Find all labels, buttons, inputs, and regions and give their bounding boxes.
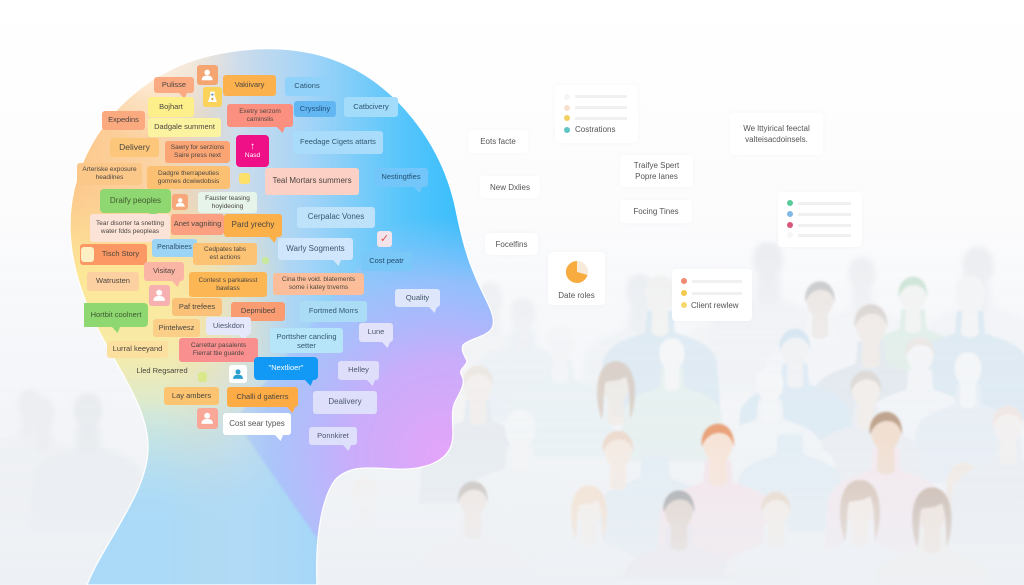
bubble: helley: Helley xyxy=(348,365,369,374)
bubble: lurral xyxy=(107,341,168,358)
card: pie chart date roles xyxy=(548,252,605,305)
blue shirts centre xyxy=(593,456,717,565)
bubble: cedpates: est actions xyxy=(209,254,241,261)
bubble: watrusten: Watrusten xyxy=(96,276,130,285)
bubble: arteriske: Arteriske exposure xyxy=(82,166,137,173)
silhouettes, back row xyxy=(377,242,1024,426)
bubble: quality xyxy=(395,289,440,307)
bubble: cations xyxy=(285,77,329,96)
bubble: carrettar xyxy=(179,338,258,362)
bubble: ponnkiret xyxy=(309,427,357,445)
bubble: bojhart xyxy=(148,97,194,117)
person blue hair xyxy=(736,329,854,467)
icon: white person xyxy=(229,365,247,383)
bubble: bojhart: Bojhart xyxy=(159,102,183,111)
silhouettes, lower left xyxy=(0,389,147,531)
icon: check mark: ✓ xyxy=(380,233,389,245)
bubble: fauster: hoyideoing xyxy=(212,202,243,210)
bubble: draify peoples: Draify peoples xyxy=(110,196,161,205)
man tan hair bottom xyxy=(724,492,828,575)
bubble: nesting xyxy=(374,168,428,187)
bubble: uieskdon xyxy=(206,317,251,335)
bubble: lurral: Lurral keeyand xyxy=(113,344,162,353)
bubble: expedins: Expedins xyxy=(108,115,139,124)
bubble: arteriske xyxy=(77,163,142,185)
bubble: cedpates xyxy=(193,243,257,265)
bubble: penalbiees xyxy=(152,239,197,257)
man tan hair xyxy=(807,371,925,509)
bubble: depmibed xyxy=(231,302,285,321)
bubble: feedage xyxy=(293,131,383,154)
bubble: depmibed: Depmibed xyxy=(241,306,275,315)
bubble: contest: bawlass xyxy=(216,284,240,292)
bubble: catbcivery xyxy=(344,97,398,117)
bubble: pink highlight: ↑ xyxy=(250,141,255,152)
bubble: arteriske: headilnes xyxy=(96,174,123,181)
bubble: tisch story xyxy=(80,244,147,265)
icon: yellow document xyxy=(203,87,222,107)
card: focing tines xyxy=(620,200,692,223)
faded crowd of people xyxy=(0,242,1024,565)
bubble: dealivery: Dealivery xyxy=(328,397,362,406)
bubble: cryssliny: Cryssliny xyxy=(300,104,330,113)
man with orange hair and pink shirt xyxy=(656,424,780,569)
card: traifye spert: Traifye Spert xyxy=(634,161,679,170)
bubble: visitay: Visitay xyxy=(153,266,175,275)
man in white, grey hair xyxy=(763,281,877,415)
bubble: challi: Challi d gatierrs xyxy=(236,392,289,401)
man in blue-grey shirt xyxy=(808,304,934,452)
bubble: dadgale summent xyxy=(148,118,221,137)
person with green hair xyxy=(857,277,969,408)
bubble: exetry xyxy=(227,104,293,127)
bubble: cedpates: Cedpates tabs xyxy=(204,246,246,253)
bubble: delivery: Delivery xyxy=(119,142,150,152)
card: client review list xyxy=(672,269,752,321)
bubble: helley xyxy=(338,361,379,380)
bubble: uieskdon: Uieskdon xyxy=(213,321,244,330)
bubble: cost sear types: Cost sear types xyxy=(229,419,285,428)
front row of the crowd xyxy=(420,361,989,583)
icon: small yellow square xyxy=(239,173,250,184)
head profile with gradient xyxy=(70,49,494,585)
icon: small green square xyxy=(262,257,269,264)
bubble: exetry: Exetry serzom xyxy=(239,108,281,115)
bubble: cina: Cina the void. blatements xyxy=(282,276,355,283)
bubble: fortmed: Fortmed Morrs xyxy=(309,306,358,315)
bubble: feedage: Feedage Cigets attarts xyxy=(300,137,376,146)
bubble: next dose: "Nextlioer" xyxy=(269,363,303,372)
bubble: dadgre: gomnes dcwiwdobsis xyxy=(158,178,219,184)
card text: client review: Client rewlew xyxy=(691,301,739,310)
bubble: exetry: caminslis xyxy=(247,116,273,122)
woman bottom centre xyxy=(802,480,918,577)
card: eots facte xyxy=(468,130,528,153)
bubble: contest xyxy=(189,272,267,297)
icon: coral person xyxy=(197,408,218,429)
bubble: fortmed xyxy=(300,301,367,322)
man with dark hair and mauve shirt xyxy=(623,491,735,579)
bubble: fauster: Fauster teasing xyxy=(205,194,250,202)
card: coloured list xyxy=(778,192,862,247)
bubble: lune xyxy=(359,323,393,342)
bubble: pink highlight: Nasd xyxy=(245,152,260,159)
blue shirt person, far right xyxy=(908,275,1024,420)
bubble: lay ambers xyxy=(164,387,219,405)
pie chart xyxy=(566,261,588,283)
bubble: anet xyxy=(171,214,224,235)
bubble: teal mortars: Teal Mortars summers xyxy=(272,176,352,185)
pale silhouette group xyxy=(458,367,873,565)
card: traifye spert: Popre lanes xyxy=(635,172,678,181)
plain label: lled regsarred: Lled Regsarred xyxy=(136,366,188,375)
card: we ittyirical: valteisacdoinsels. xyxy=(745,135,808,144)
card: focing tines: Focing Tines xyxy=(633,207,679,216)
icon: check mark xyxy=(377,231,392,247)
bubble: dadgale summent: Dadgale summent xyxy=(154,122,215,131)
bubble: fauster xyxy=(198,192,257,213)
peach hair woman bottom xyxy=(537,486,641,573)
card: new dxlies: New Dxlies xyxy=(490,182,530,192)
bubble: tisch story: Tisch Story xyxy=(102,249,139,258)
bubble: catbcivery: Catbcivery xyxy=(353,102,389,111)
bubble: challi xyxy=(227,387,298,407)
bubble: porttsher: Porttsher cancling xyxy=(276,332,337,340)
bubble: pink highlight xyxy=(236,135,269,167)
bubble: expedins xyxy=(102,111,145,130)
bubble: nesting: Nestingtfies xyxy=(381,172,421,181)
icon: orange person small xyxy=(172,194,188,210)
icon: orange person xyxy=(197,65,218,85)
pale silhouettes, mid row xyxy=(504,327,616,458)
bubble: cerpalac xyxy=(297,207,375,228)
bubble: warly xyxy=(278,238,353,260)
bubble: valdivery: Vakiivary xyxy=(235,80,264,89)
pale veil over the far crowd xyxy=(0,230,1024,585)
bubble: tear: Tear disorter ta snetting xyxy=(96,220,164,227)
bubble: pulse xyxy=(154,77,194,93)
card: we ittyirical xyxy=(730,113,823,155)
man tan hair with white coat xyxy=(603,431,633,490)
bubble: porttsher xyxy=(270,328,343,353)
blue shirt person, back left xyxy=(599,275,721,418)
bubble: watrusten xyxy=(87,272,139,291)
card: focelfins xyxy=(485,233,538,255)
bubble: sawry xyxy=(165,141,230,163)
bubble: quality: Quality xyxy=(406,293,429,302)
bubble: pulse: Pulisse xyxy=(162,80,186,89)
bubble: ponnkiret: Ponnkiret xyxy=(317,431,349,440)
bubble: cost peatr xyxy=(361,252,412,271)
bubble: hortbit xyxy=(84,303,148,327)
bubble: tear xyxy=(90,214,170,242)
card: we ittyirical: We lttyirical feectal xyxy=(743,124,810,133)
bubble: pintelwesz: Pintelwesz xyxy=(159,323,194,332)
bubble: sawry: Saire press next xyxy=(174,152,221,159)
woman with brown hair xyxy=(597,361,635,425)
bubble: dadgre xyxy=(147,166,230,189)
bottom fade xyxy=(0,440,1024,585)
card: focelfins: Focelfins xyxy=(495,240,528,248)
woman peach hair right xyxy=(912,462,1016,550)
bubble: teal mortars xyxy=(265,168,359,195)
bubble: sawry: Sawry for serzions xyxy=(171,144,224,151)
bubble: anet: Anet vagniting xyxy=(174,219,221,228)
bubble: draify peoples xyxy=(100,189,171,213)
bubble: cost peatr: Cost peatr xyxy=(369,256,404,265)
bubble: dadgre: Dadgre therrapeuties xyxy=(158,170,219,176)
bubble: hortbit: Hortbit coolnert xyxy=(91,310,141,319)
man grey-blue shirt left xyxy=(419,366,537,504)
bubble: visitay xyxy=(144,262,184,281)
card: traifye spert xyxy=(620,155,693,187)
bubble: dealivery xyxy=(313,391,377,414)
bubble: penalbiees: Penalbiees xyxy=(157,244,192,251)
bubble: tear: water fdds peopleas xyxy=(101,228,159,235)
bubble: pard xyxy=(224,214,282,237)
bubble: pintelwesz xyxy=(153,319,200,337)
card: eots facte: Eots facte xyxy=(480,137,516,146)
card text: costrations: Costrations xyxy=(575,125,615,134)
bubble: carrettar: Fierrat ttie guarde xyxy=(193,350,244,357)
icon: pink person xyxy=(149,285,170,306)
bubble: paf trefees: Paf trefees xyxy=(179,302,215,311)
icon: small lime square xyxy=(198,372,207,382)
woman dark hair bottom right xyxy=(875,488,989,583)
man with brown hair and pink shirt xyxy=(824,412,948,557)
bubble: cryssliny xyxy=(294,101,336,117)
bubble: cerpalac: Cerpalac Vones xyxy=(308,212,364,221)
bubble: porttsher: setter xyxy=(297,340,316,350)
bubble: lay ambers: Lay ambers xyxy=(172,391,211,400)
bubble: lune: Lune xyxy=(368,327,384,336)
bubble: carrettar: Carrettar pasalents xyxy=(191,342,246,349)
bubble: delivery xyxy=(110,138,159,157)
bubble: cost sear types xyxy=(223,413,291,435)
bubble: cina xyxy=(273,273,364,295)
bubble: cina: some i katey tnvems xyxy=(289,284,348,291)
icon: tisch story badge xyxy=(81,247,94,262)
card: new dxlies xyxy=(480,176,540,198)
bubble: warly: Warly Sogments xyxy=(286,244,345,253)
bubble: next dose xyxy=(254,357,318,380)
person with pink hair far right xyxy=(949,406,1024,544)
card text: date roles: Date roles xyxy=(558,291,595,300)
grey-haired man bottom left xyxy=(420,481,526,566)
silhouette under the head xyxy=(316,478,414,556)
bubble: paf trefees xyxy=(172,298,222,316)
bubble: pard: Pard yrechy xyxy=(232,220,274,229)
bubble: cations: Cations xyxy=(294,81,320,90)
card: list with costrations xyxy=(555,85,638,143)
bubble: contest: Contest s parkalesst xyxy=(199,276,257,284)
bubble: valdivery xyxy=(223,75,276,96)
